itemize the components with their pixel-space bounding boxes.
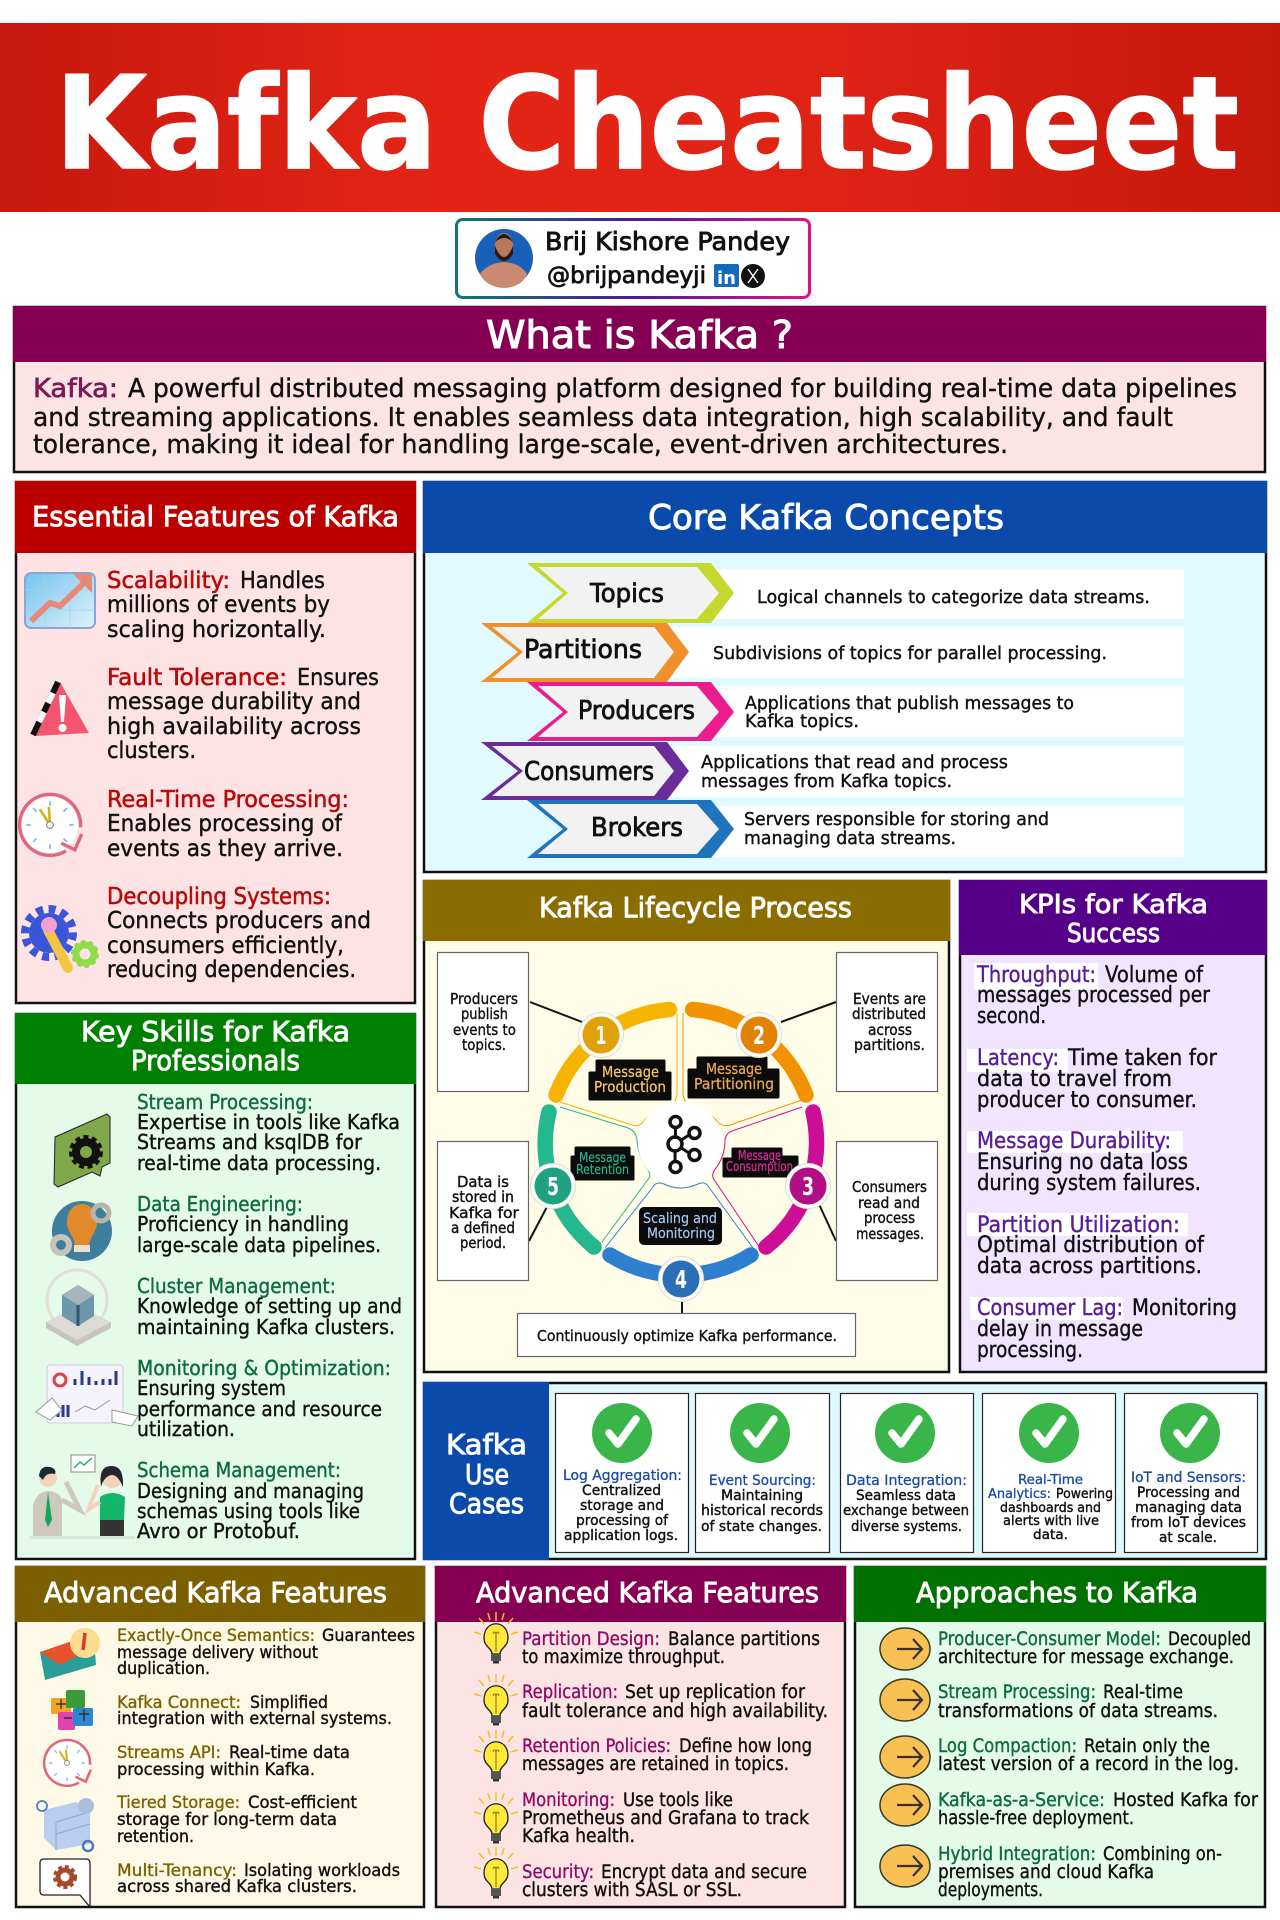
icon: bulb 5 <box>474 1847 518 1898</box>
tip: replication: Set up replication for <box>625 1682 805 1703</box>
heading: what is kafka: What is Kafka ? <box>486 313 793 357</box>
card: data integration <box>840 1394 974 1552</box>
feature: fault tolerance <box>107 665 379 764</box>
badge: step 4 <box>658 1256 704 1302</box>
icon: author avatar <box>475 229 533 288</box>
label: scaling and monitoring <box>639 1207 722 1245</box>
skill: cluster management: Cluster Management: <box>137 1274 336 1298</box>
icon: arrow 3 <box>880 1736 930 1778</box>
callout: consumers read: process <box>864 1209 915 1227</box>
skill: cluster management <box>137 1274 402 1339</box>
card: event sourcing: of state changes. <box>701 1519 822 1535</box>
concept: partitions <box>481 623 1184 682</box>
skill: data engineering: large-scale data pipelines. <box>137 1233 381 1257</box>
approach: kafka-as-a-service: Hosted Kafka for <box>1113 1789 1258 1811</box>
feature: kafka connect: integration with external systems. <box>117 1709 392 1729</box>
heading: core kafka concepts <box>423 481 1267 553</box>
concept: partitions: Subdivisions of topics for parallel processing. <box>713 643 1107 664</box>
approach: producer-consumer model <box>938 1628 1251 1668</box>
concept: brokers <box>527 800 1184 858</box>
card: iot and sensors: IoT and Sensors: <box>1131 1470 1246 1486</box>
text: kafka definition <box>33 374 1237 460</box>
callout: data stored: stored in <box>452 1188 514 1206</box>
author handle: @brijpandeyji <box>547 263 706 289</box>
icon: clock <box>20 794 82 855</box>
feature: multi-tenancy <box>117 1861 400 1897</box>
icon: bulb 4 <box>474 1792 518 1844</box>
card: real-time analytics <box>982 1394 1116 1552</box>
badge: step 3: 3 <box>802 1172 814 1201</box>
kpi: partition utilization: Partition Utilization: <box>977 1213 1180 1238</box>
approach: producer-consumer model: Producer-Consumer Model: <box>938 1628 1161 1650</box>
callout: producers publish: Producers <box>450 990 518 1008</box>
skill: stream processing: real-time data processing. <box>137 1151 381 1175</box>
callout: events distributed: Events are <box>853 990 926 1008</box>
label: message retention: Message <box>579 1151 626 1166</box>
approach: log compaction: Retain only the <box>1084 1735 1210 1757</box>
callout: continuously optimize: Continuously optimize Kafka performance. <box>537 1327 837 1345</box>
tip: security: clusters with SASL or SSL. <box>522 1880 742 1901</box>
kpi: latency: producer to consumer. <box>977 1088 1197 1113</box>
callout: producers publish: publish <box>461 1005 508 1023</box>
skill: schema management: Designing and managing <box>137 1479 364 1503</box>
icon: lightbulb circle <box>52 1201 112 1261</box>
feature: streams api: Real-time data <box>229 1743 350 1763</box>
feature: exactly-once semantics: message delivery without <box>117 1643 318 1663</box>
heading: approaches: Approaches to Kafka <box>916 1576 1198 1609</box>
skill: monitoring and optimization: Ensuring system <box>137 1376 286 1400</box>
icon: bulb 3 <box>474 1730 518 1782</box>
approach: stream processing: Real-time <box>1103 1681 1183 1703</box>
callout: consumers read: read and <box>858 1194 920 1212</box>
panel: kafka use cases <box>423 1382 1266 1560</box>
icon: x logo <box>741 264 765 288</box>
tip: monitoring: Use tools like <box>623 1790 733 1811</box>
heading: core kafka concepts: Core Kafka Concepts <box>648 498 1004 538</box>
heading: advanced features left <box>15 1566 425 1622</box>
skill: monitoring and optimization: Monitoring & Optimization: <box>137 1356 391 1380</box>
panel: core kafka concepts <box>423 481 1267 872</box>
card: real-time analytics: dashboards and <box>1000 1500 1101 1516</box>
card: real-time analytics: Real-Time <box>1018 1472 1083 1488</box>
card: iot and sensors: from IoT devices <box>1131 1515 1246 1531</box>
tip: partition design: Balance partitions <box>668 1629 820 1650</box>
card: log aggregation: storage and <box>580 1498 664 1514</box>
icon: speech gear <box>40 1859 90 1907</box>
approach: log compaction: latest version of a record in the log. <box>938 1753 1239 1775</box>
feature: fault tolerance: high availability across <box>107 714 361 740</box>
icon: growth chart <box>25 573 95 628</box>
label: message retention: Retention <box>576 1163 629 1178</box>
card: real-time analytics: Analytics: <box>988 1486 1051 1502</box>
tip: partition design: to maximize throughput. <box>522 1647 725 1668</box>
label: message partitioning: Partitioning <box>694 1075 774 1093</box>
feature: fault tolerance: Ensures <box>297 665 379 691</box>
feature: multi-tenancy: Isolating workloads <box>244 1861 400 1881</box>
panel: kpis <box>959 880 1267 1372</box>
skill: monitoring and optimization <box>137 1356 391 1441</box>
skill: stream processing: Streams and ksqlDB for <box>137 1130 363 1154</box>
skill: cluster management: Knowledge of setting up and <box>137 1294 402 1318</box>
feature: scalability: scaling horizontally. <box>107 617 326 643</box>
panel: key skills <box>15 1013 416 1559</box>
tip: security: Security: <box>522 1862 594 1883</box>
badge: step 2 <box>736 1012 782 1058</box>
kpi: message durability <box>967 1129 1201 1196</box>
kpi: consumer lag: Consumer Lag: <box>977 1296 1123 1321</box>
label: scaling and monitoring: Scaling and <box>643 1211 717 1227</box>
text: kafka definition: Kafka: <box>33 374 118 404</box>
text: kafka definition: and streaming applications. It enables seamless data integration, high scalability, and fault <box>33 403 1173 433</box>
feature: decoupling systems: Decoupling Systems: <box>107 884 331 910</box>
card: log aggregation: application logs. <box>564 1528 678 1544</box>
badge: step 3 <box>786 1164 830 1208</box>
label: message production <box>590 1061 670 1099</box>
label: message partitioning <box>689 1058 778 1097</box>
card: log aggregation <box>556 1394 688 1552</box>
skill: monitoring and optimization: performance and resource <box>137 1397 382 1421</box>
feature: exactly-once semantics <box>117 1626 415 1679</box>
approach: log compaction: Log Compaction: <box>938 1735 1077 1757</box>
skill: schema management: Avro or Protobuf. <box>137 1519 300 1543</box>
label: scaling and monitoring: Monitoring <box>647 1226 715 1242</box>
badge: step 1: 1 <box>596 1021 606 1050</box>
heading: advanced features middle: Advanced Kafka Features <box>476 1576 819 1609</box>
tip: security: Encrypt data and secure <box>601 1862 807 1883</box>
kpi: throughput: messages processed per <box>977 983 1211 1008</box>
card: iot and sensors: at scale. <box>1159 1530 1217 1546</box>
kpi: consumer lag <box>970 1296 1237 1363</box>
concept: consumers: messages from Kafka topics. <box>701 771 952 792</box>
feature: kafka connect <box>117 1693 392 1729</box>
feature: streams api: processing within Kafka. <box>117 1760 315 1780</box>
feature: streams api <box>117 1743 350 1780</box>
icon: speech bubble gear <box>54 1114 110 1187</box>
heading: what is kafka <box>13 306 1266 362</box>
feature: kafka connect: Kafka Connect: <box>117 1693 241 1713</box>
callout: data stored: a defined <box>451 1219 515 1237</box>
card: data integration: exchange between <box>843 1503 969 1519</box>
label: message consumption: Message <box>738 1149 781 1164</box>
kpi: latency: data to travel from <box>977 1067 1172 1092</box>
tip: replication: fault tolerance and high availability. <box>522 1701 828 1722</box>
icon: puzzle pieces <box>51 1690 93 1730</box>
icon: bulb 1 <box>474 1612 518 1664</box>
callout: consumers read: messages. <box>856 1225 924 1243</box>
approach: log compaction <box>938 1735 1239 1775</box>
approach: hybrid integration: deployments. <box>938 1879 1043 1901</box>
skill: data engineering: Data Engineering: <box>137 1192 303 1216</box>
heading: key skills <box>15 1013 416 1084</box>
text: kafka definition: A powerful distributed messaging platform designed for building real-time data pipelines <box>128 374 1237 404</box>
heading: use cases: Kafka <box>446 1428 527 1461</box>
feature: fault tolerance: message durability and <box>107 689 361 715</box>
feature: scalability: Handles <box>240 568 325 594</box>
heading: essential features: Essential Features of Kafka <box>32 500 399 533</box>
icon: kafka logo <box>638 1101 722 1185</box>
feature: tiered storage: Cost-efficient <box>248 1793 357 1813</box>
kpi: partition utilization: data across partitions. <box>977 1254 1202 1279</box>
kpi: throughput: Volume of <box>1105 963 1204 988</box>
icon: server storage <box>37 1798 94 1851</box>
card: real-time analytics: data. <box>1033 1527 1068 1543</box>
heading: kpis: KPIs for Kafka <box>1019 890 1208 920</box>
panel: kafka lifecycle process <box>423 880 950 1372</box>
heading: approaches <box>854 1566 1266 1622</box>
text: kafka definition: tolerance, making it ideal for handling large-scale, event-driven architectures. <box>33 430 1008 460</box>
kpi: throughput: Throughput: <box>976 963 1096 988</box>
concept: topics: Logical channels to categorize data streams. <box>757 587 1150 608</box>
panel: advanced kafka features (middle) <box>435 1566 846 1907</box>
icon: gears and wrench <box>25 909 97 968</box>
badge: step 5 <box>530 1164 576 1208</box>
feature: tiered storage: storage for long-term data <box>117 1810 337 1830</box>
kpi: throughput <box>974 963 1211 1029</box>
kpi: consumer lag: delay in message <box>977 1317 1143 1342</box>
feature: fault tolerance: Fault Tolerance: <box>107 665 287 691</box>
feature: streams api: Streams API: <box>117 1743 221 1763</box>
kpi: latency <box>967 1046 1218 1113</box>
concept: consumers: Consumers <box>524 757 654 787</box>
kpi: message durability: during system failures. <box>977 1171 1201 1196</box>
panel: approaches to kafka <box>854 1566 1266 1907</box>
callout: consumers read <box>836 1142 938 1280</box>
feature: scalability: millions of events by <box>107 592 330 618</box>
callout: data stored: period. <box>460 1234 506 1252</box>
tip: monitoring: Kafka health. <box>522 1826 635 1847</box>
callout: data stored: Kafka for <box>449 1204 520 1222</box>
approach: hybrid integration: Combining on- <box>1103 1843 1222 1865</box>
feature: decoupling systems: reducing dependencies. <box>107 957 356 983</box>
tip: retention policies <box>522 1736 812 1775</box>
icon: arrow 2 <box>880 1679 930 1721</box>
heading: advanced features left: Advanced Kafka Features <box>44 1576 387 1609</box>
kpi: partition utilization: Optimal distribution of <box>977 1233 1205 1258</box>
skill: cluster management: maintaining Kafka clusters. <box>137 1315 395 1339</box>
heading: use cases: Cases <box>449 1487 524 1520</box>
feature: fault tolerance: clusters. <box>107 738 196 764</box>
approach: kafka-as-a-service <box>938 1789 1258 1829</box>
tip: retention policies: Retention Policies: <box>522 1736 671 1757</box>
diagram: lifecycle wheel <box>530 1010 830 1302</box>
badge: step 1 <box>578 1012 624 1058</box>
icon: arrow 5 <box>880 1845 930 1887</box>
tip: partition design: Partition Design: <box>522 1629 660 1650</box>
skill: stream processing <box>137 1090 400 1175</box>
skill: data engineering <box>137 1192 381 1257</box>
icon: envelope <box>40 1628 100 1680</box>
feature: real-time processing: events as they arrive. <box>107 836 343 862</box>
tip: security <box>522 1862 807 1901</box>
panel: advanced kafka features (left) <box>15 1566 425 1907</box>
callout: producers publish: events to <box>453 1021 516 1039</box>
feature: exactly-once semantics: Guarantees <box>322 1626 415 1646</box>
label: message partitioning: Message <box>706 1060 762 1078</box>
card: event sourcing: Maintaining <box>721 1488 803 1504</box>
tip: retention policies: messages are retained in topics. <box>522 1754 789 1775</box>
heading: key skills: Professionals <box>131 1044 300 1077</box>
kpi: latency: Time taken for <box>1067 1046 1218 1071</box>
callout: producers publish: topics. <box>462 1036 506 1054</box>
skill: monitoring and optimization: utilization. <box>137 1417 235 1441</box>
icon: arrow 4 <box>880 1784 930 1826</box>
callout: data stored: Data is <box>457 1173 509 1191</box>
skill: data engineering: Proficiency in handling <box>137 1212 349 1236</box>
callout: events distributed: partitions. <box>854 1036 925 1054</box>
label: message production: Message <box>602 1063 659 1081</box>
callout: events distributed: across <box>868 1021 912 1039</box>
heading: advanced features middle <box>435 1566 846 1622</box>
panel: essential features <box>15 481 416 1003</box>
label: message production: Production <box>594 1078 666 1096</box>
feature: decoupling systems: Connects producers and <box>107 908 371 934</box>
feature: exactly-once semantics: Exactly-Once Semantics: <box>117 1626 315 1646</box>
card: iot and sensors: Processing and <box>1137 1485 1240 1501</box>
feature: multi-tenancy: across shared Kafka clusters. <box>117 1877 357 1897</box>
heading: lifecycle: Kafka Lifecycle Process <box>539 891 852 924</box>
concept: brokers: Brokers <box>591 813 683 843</box>
skill: schema management: schemas using tools like <box>137 1499 360 1523</box>
card: event sourcing: historical records <box>701 1503 823 1519</box>
approach: producer-consumer model: Decoupled <box>1168 1628 1251 1650</box>
heading: kpis: Success <box>1067 919 1160 949</box>
callout: data stored <box>438 1142 528 1280</box>
card: data integration: diverse systems. <box>851 1519 962 1535</box>
skill: schema management: Schema Management: <box>137 1458 341 1482</box>
card: real-time analytics: Powering <box>1056 1486 1113 1502</box>
feature: scalability <box>107 568 330 643</box>
approach: stream processing: Stream Processing: <box>938 1681 1096 1703</box>
concept: producers: Kafka topics. <box>745 711 859 732</box>
approach: kafka-as-a-service: hassle-free deployment. <box>938 1807 1134 1829</box>
tip: replication <box>522 1682 828 1722</box>
panel: what is kafka <box>13 306 1266 472</box>
approach: hybrid integration: Hybrid Integration: <box>938 1843 1096 1865</box>
kpi: partition utilization <box>967 1213 1205 1279</box>
feature: real-time processing <box>107 787 349 862</box>
feature: decoupling systems: consumers efficiently, <box>107 933 344 959</box>
kpi: throughput: second. <box>977 1004 1046 1029</box>
concept: producers: Producers <box>578 696 695 726</box>
concept: brokers: managing data streams. <box>744 828 956 849</box>
icon: two people <box>30 1455 135 1539</box>
callout: consumers read: Consumers <box>852 1178 927 1196</box>
feature: kafka connect: Simplified <box>250 1693 328 1713</box>
badge: step 4: 4 <box>675 1265 687 1294</box>
card: log aggregation: Log Aggregation: <box>563 1468 682 1484</box>
skill: stream processing: Expertise in tools like Kafka <box>137 1110 400 1134</box>
concept: topics <box>527 563 1184 623</box>
heading: essential features <box>15 481 416 553</box>
approach: kafka-as-a-service: Kafka-as-a-Service: <box>938 1789 1105 1811</box>
icon: bulb 2 <box>474 1674 518 1726</box>
author card <box>456 220 810 298</box>
feature: multi-tenancy: Multi-Tenancy: <box>117 1861 237 1881</box>
approach: hybrid integration <box>938 1843 1222 1901</box>
feature: tiered storage: retention. <box>117 1827 194 1847</box>
connector lines <box>529 1002 836 1313</box>
feature: exactly-once semantics: duplication. <box>117 1659 210 1679</box>
heading: use cases <box>423 1382 549 1560</box>
callout: producers publish <box>438 952 528 1092</box>
badge: step 5: 5 <box>547 1172 559 1201</box>
tip: replication: Replication: <box>522 1682 618 1703</box>
icon: arrow 1 <box>880 1628 930 1670</box>
feature: tiered storage: Tiered Storage: <box>116 1793 240 1813</box>
approach: hybrid integration: premises and cloud Kafka <box>938 1861 1154 1883</box>
label: message consumption: Consumption <box>726 1160 793 1175</box>
concept: producers: Applications that publish messages to <box>745 693 1074 714</box>
tip: retention policies: Define how long <box>679 1736 812 1757</box>
approach: stream processing: transformations of data streams. <box>938 1700 1218 1722</box>
approach: stream processing <box>938 1681 1218 1722</box>
kpi: consumer lag: Monitoring <box>1132 1296 1237 1321</box>
approach: producer-consumer model: architecture for message exchange. <box>938 1646 1234 1668</box>
label: message retention <box>572 1148 633 1179</box>
callout: continuously optimize <box>518 1314 856 1356</box>
tip: monitoring: Prometheus and Grafana to track <box>522 1808 809 1829</box>
heading: kpis <box>959 880 1267 955</box>
icon: streams clock <box>44 1740 91 1786</box>
concept: topics: Topics <box>589 579 664 609</box>
callout: events distributed: distributed <box>852 1005 926 1023</box>
card: data integration: Data Integration: <box>846 1473 967 1489</box>
kpi: message durability: Message Durability: <box>977 1129 1171 1154</box>
card: iot and sensors: managing data <box>1135 1500 1242 1516</box>
card: event sourcing: Event Sourcing: <box>709 1473 816 1489</box>
kpi: latency: Latency: <box>977 1046 1059 1071</box>
tip: monitoring <box>522 1790 809 1847</box>
card: iot and sensors <box>1124 1394 1258 1552</box>
feature: real-time processing: Enables processing of <box>107 811 343 837</box>
feature: decoupling systems <box>107 884 371 983</box>
icon: cluster cube <box>46 1270 111 1346</box>
heading: lifecycle <box>423 880 950 941</box>
skill: stream processing: Stream Processing: <box>137 1090 313 1114</box>
feature: tiered storage <box>116 1793 357 1847</box>
icon: linkedin <box>714 264 739 289</box>
concept: partitions: Partitions <box>524 635 642 665</box>
kpi: consumer lag: processing. <box>977 1338 1083 1363</box>
skill: schema management <box>137 1458 364 1543</box>
concept: brokers: Servers responsible for storing and <box>744 809 1049 830</box>
kpi: message durability: Ensuring no data loss <box>977 1150 1188 1175</box>
label: message consumption <box>724 1149 797 1176</box>
concept: consumers: Applications that read and process <box>701 752 1008 773</box>
feature: scalability: Scalability: <box>107 568 230 594</box>
icon: linkedin: in <box>717 268 736 289</box>
tip: partition design <box>522 1629 820 1668</box>
heading: key skills: Key Skills for Kafka <box>81 1015 350 1048</box>
card: log aggregation: processing of <box>576 1513 669 1529</box>
author name: Brij Kishore Pandey <box>545 227 790 256</box>
badge: step 2: 2 <box>753 1021 765 1050</box>
feature: real-time processing: Real-Time Processing: <box>107 787 349 813</box>
concept: consumers <box>481 742 1184 800</box>
icon: dashboard <box>36 1365 138 1426</box>
callout: events distributed <box>836 952 938 1092</box>
tip: monitoring: Monitoring: <box>522 1790 615 1811</box>
card: event sourcing <box>696 1394 830 1552</box>
card: log aggregation: Centralized <box>582 1483 661 1499</box>
heading: use cases: Use <box>465 1458 509 1491</box>
card: real-time analytics: alerts with live <box>1003 1513 1099 1529</box>
card: data integration: Seamless data <box>856 1488 956 1504</box>
concept: producers <box>527 682 1184 741</box>
icon: warning triangle <box>33 682 89 736</box>
